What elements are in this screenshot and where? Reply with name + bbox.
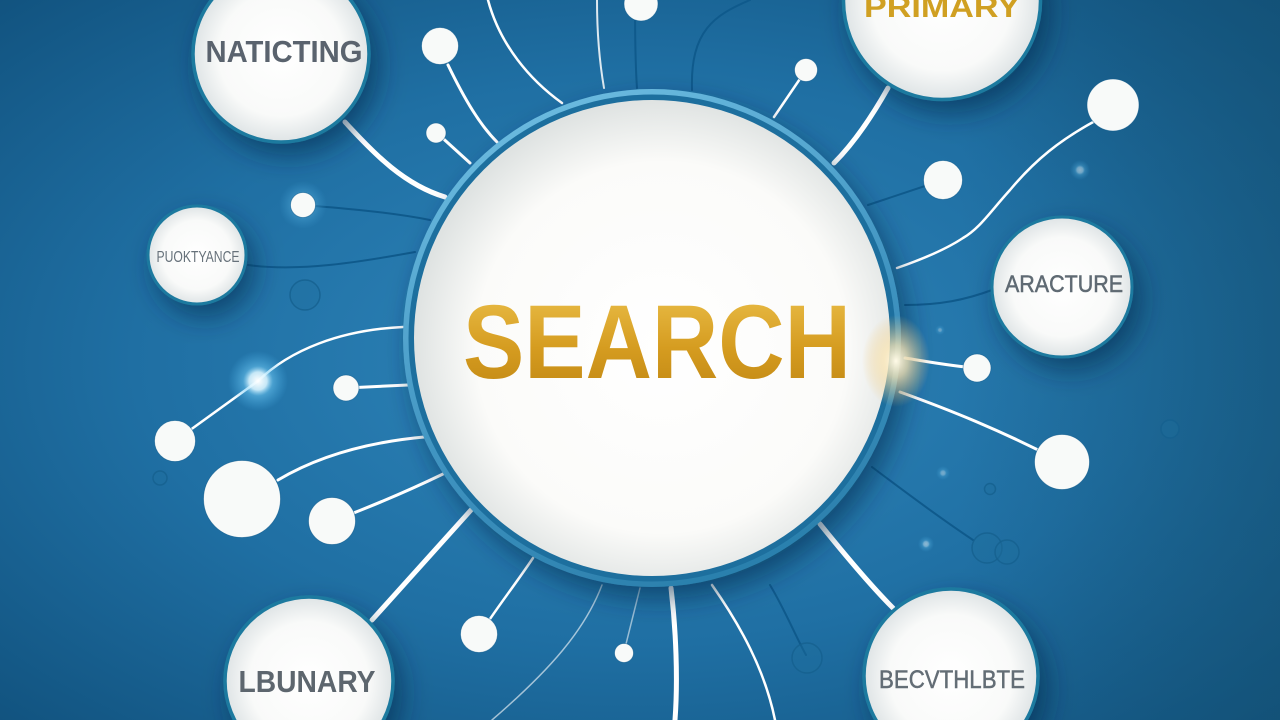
label: BECVTHLBTE: BECVTHLBTE bbox=[879, 666, 1025, 694]
decorative outlined dots bbox=[153, 280, 1179, 673]
label: PUOKTYANCE: PUOKTYANCE bbox=[156, 249, 240, 266]
glow: left spark bbox=[228, 351, 288, 411]
central circle bbox=[403, 89, 901, 587]
label: ARACTURE: ARACTURE bbox=[1005, 271, 1123, 298]
node: PUOKTYANCE bbox=[148, 206, 246, 304]
node: NATICTING bbox=[193, 0, 369, 142]
glow: gold flare bbox=[862, 315, 930, 407]
node: LBUNARY bbox=[225, 597, 393, 720]
node: BECVTHLBTE bbox=[864, 589, 1038, 720]
satellite node dots bbox=[154, 0, 1139, 662]
connector lines bbox=[175, 0, 1095, 720]
dark connector lines bbox=[248, 0, 992, 655]
node: ARACTURE bbox=[992, 217, 1132, 357]
title: SEARCH: SEARCH bbox=[463, 284, 851, 401]
node: PRIMARY bbox=[844, 0, 1040, 100]
glow: small sparks bbox=[279, 160, 1090, 552]
label: LBUNARY: LBUNARY bbox=[238, 664, 376, 699]
label: NATICTING: NATICTING bbox=[206, 34, 362, 69]
